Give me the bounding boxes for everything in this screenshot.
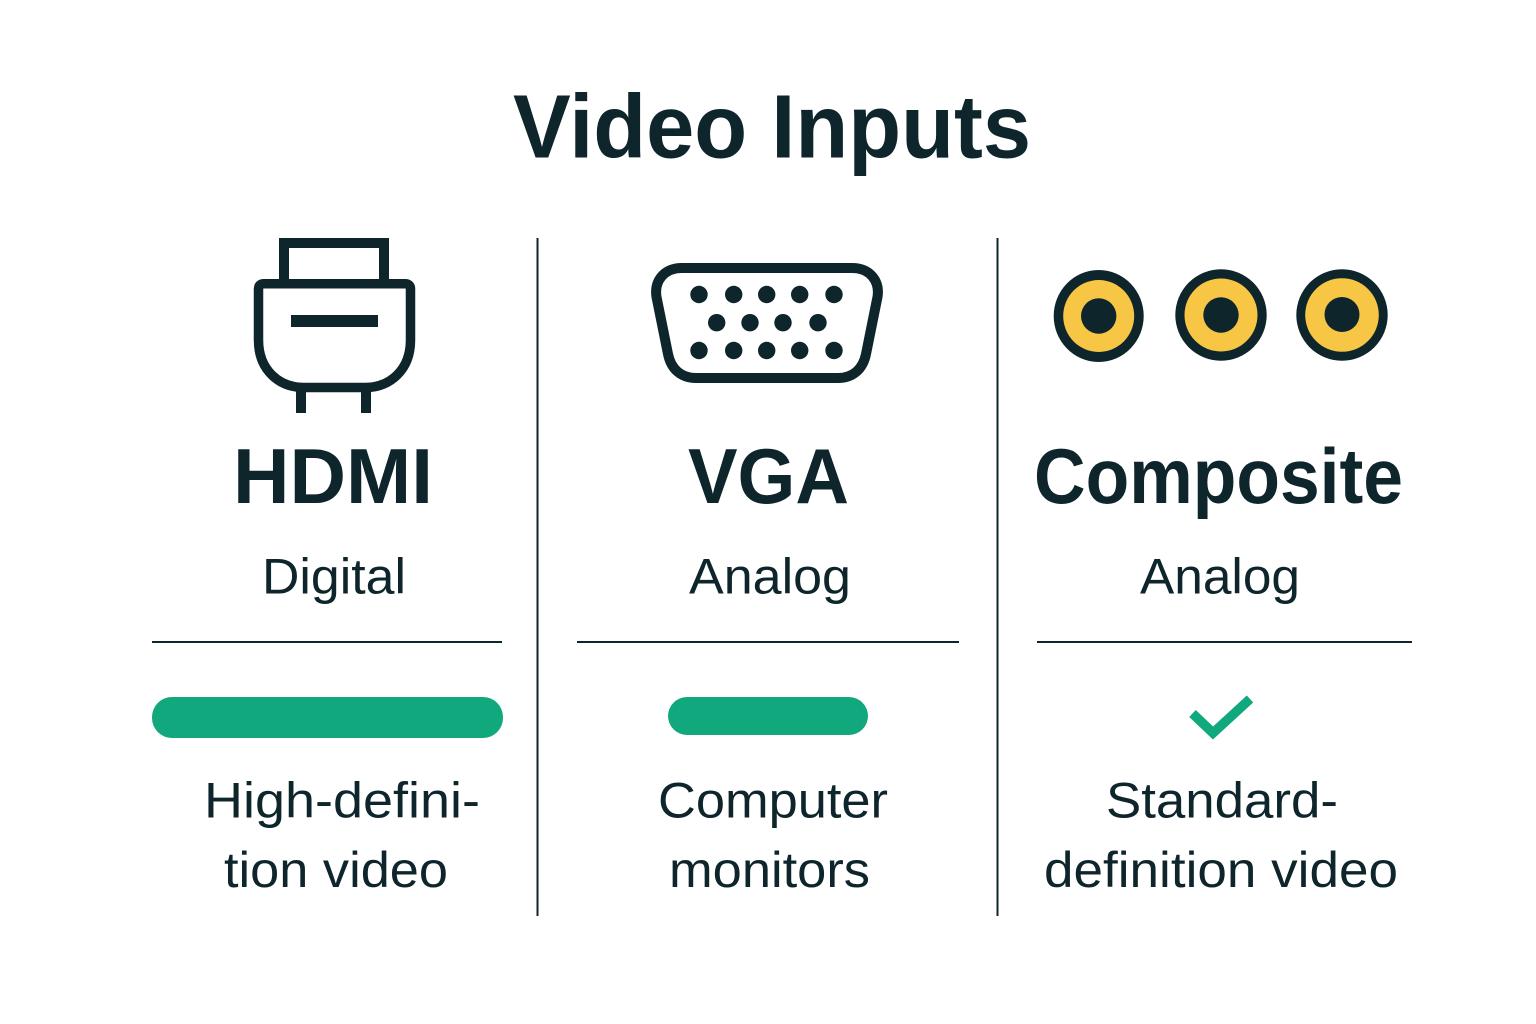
- signal type: Analog: Analog: [689, 548, 851, 604]
- panel: VGA: [577, 268, 959, 898]
- heading: HDMI: HDMI: [233, 432, 433, 520]
- quality bar: HDMI: [152, 697, 503, 738]
- icon: check mark: [1192, 699, 1250, 733]
- description: Composite: Standard-: [1106, 772, 1338, 828]
- signal type: Digital: Digital: [262, 548, 406, 604]
- description: Composite: definition video: [1044, 842, 1398, 898]
- description: HDMI: High-defini-: [204, 772, 480, 828]
- icon: HDMI connector: [258, 243, 410, 413]
- title: Video Inputs: [513, 78, 1031, 178]
- signal type: Analog: Analog: [1140, 548, 1300, 604]
- description: VGA: monitors: [669, 842, 870, 898]
- quality bar: VGA: [668, 697, 868, 735]
- panel: Composite: [1034, 269, 1412, 898]
- icon: RCA connectors: [1054, 269, 1388, 362]
- heading: Composite: Composite: [1034, 432, 1403, 520]
- heading: VGA: VGA: [688, 432, 849, 520]
- description: HDMI: tion video: [224, 842, 448, 898]
- icon: VGA connector: [656, 268, 878, 378]
- description: VGA: Computer: [658, 772, 888, 828]
- panel: HDMI: [152, 243, 503, 898]
